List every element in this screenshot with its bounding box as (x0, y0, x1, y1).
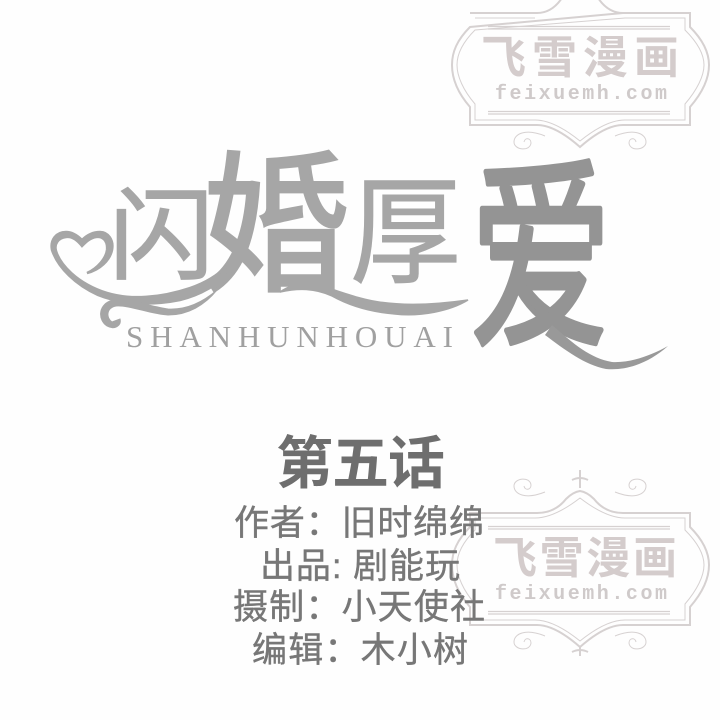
episode title: 第五话 (276, 432, 445, 496)
watermark: top (452, 0, 709, 149)
logo flourish: lower swirl (101, 290, 217, 328)
logo character 婚: 婚 (202, 141, 349, 311)
credit: producer: 出品: 剧能玩 (260, 547, 460, 586)
logo character 厚: 厚 (350, 168, 461, 300)
credits (233, 504, 485, 670)
credit: author: 作者：旧时绵绵 (234, 504, 484, 543)
watermark url: bottom: feixuemh.com (495, 583, 667, 606)
watermark title: bottom: 飞雪漫画 (493, 534, 677, 583)
watermark frame: bottom (452, 470, 709, 656)
logo character 爱: 爱 (470, 93, 612, 389)
logo subtitle: SHANHUNHOUAI (126, 319, 453, 354)
credit: editor: 编辑：木小树 (252, 631, 468, 670)
watermark frame: top (452, 0, 709, 149)
logo: 闪婚厚爱 (52, 93, 668, 389)
watermark title: top: 飞雪漫画 (481, 32, 679, 83)
logo flourish: heart swash (52, 232, 232, 303)
credit: photography: 摄制：小天使社 (233, 588, 485, 627)
logo character 闪: 闪 (109, 180, 214, 292)
logo flourish: right sweep (280, 283, 468, 315)
watermark: bottom (452, 470, 709, 656)
watermark url: top: feixuemh.com (495, 83, 667, 106)
logo brush tail (545, 325, 668, 369)
